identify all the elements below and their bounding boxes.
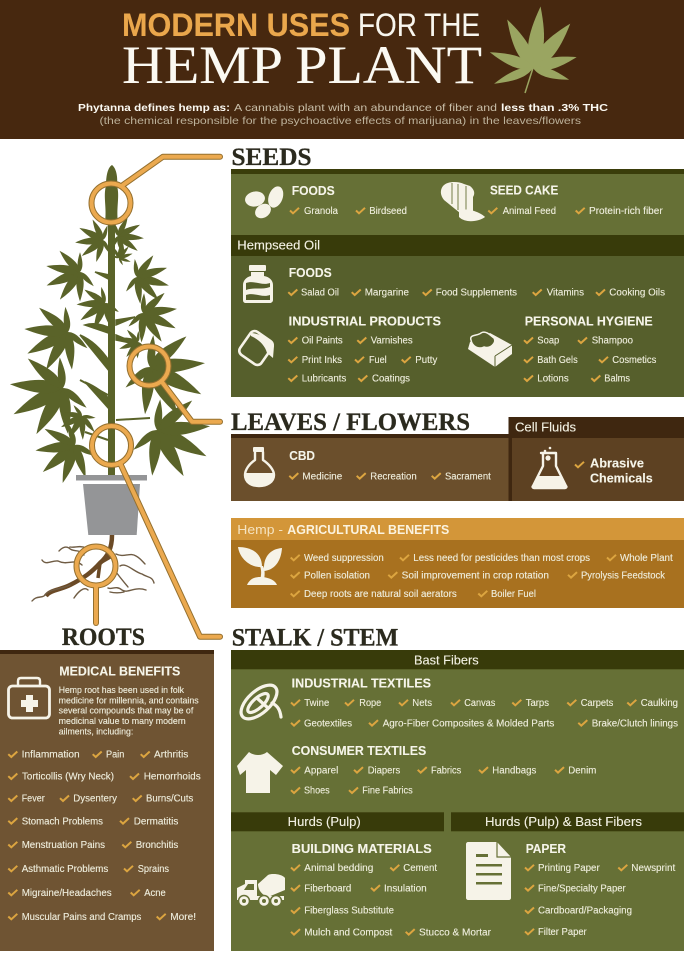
medical benefits description: medicinal value to many modern <box>59 716 186 726</box>
ailments checklist: Fever <box>22 794 45 805</box>
medical benefits description: several compounds that may be of <box>59 706 194 716</box>
industrial products: Print Inks <box>302 355 342 366</box>
consumer textiles: Fabrics <box>431 765 461 776</box>
benefits checklist: Less need for pesticides than most crops <box>413 553 590 564</box>
oil foods: FOODS <box>289 266 332 280</box>
leaves <box>0 215 227 498</box>
abrasive chemicals <box>575 457 653 485</box>
panel: leaves and flowers <box>231 409 509 501</box>
consumer textiles <box>291 744 596 797</box>
benefits checklist: Deep roots are natural soil aerators <box>304 589 457 600</box>
definition text: less than .3% THC <box>501 102 608 114</box>
cbd: Medicine <box>302 471 343 482</box>
heading: seeds: SEEDS <box>232 144 312 171</box>
benefits checklist <box>291 553 673 600</box>
oil foods: Vitamins <box>547 288 584 299</box>
band label: hurds and bast fibers: Hurds (Pulp) & Bast Fibers <box>485 815 642 829</box>
foods: Birdseed <box>369 206 407 217</box>
personal hygiene: Bath Gels <box>537 355 578 366</box>
cbd: CBD <box>289 449 315 463</box>
panel: agricultural benefits <box>231 518 684 608</box>
ailments checklist: Hemorrhoids <box>144 772 201 783</box>
ailments checklist: Inflammation <box>22 750 80 761</box>
ailments checklist: Arthritis <box>154 750 188 761</box>
icon: seeds <box>244 184 286 221</box>
foods <box>290 184 407 217</box>
title: HEMP PLANT <box>122 35 482 95</box>
personal hygiene: Soap <box>537 336 560 347</box>
seed cake: Animal Feed <box>503 206 556 217</box>
consumer textiles: Apparel <box>304 765 338 776</box>
paper: Cardboard/Packaging <box>538 906 632 917</box>
icon: medical kit <box>8 678 50 718</box>
band label: bast fibers: Bast Fibers <box>414 653 479 667</box>
abrasive chemicals: Abrasive <box>590 457 644 471</box>
benefits checklist: Pyrolysis Feedstock <box>581 570 666 581</box>
icon: bread <box>441 182 485 221</box>
ailments checklist <box>8 750 201 923</box>
ailments checklist: Migraine/Headaches <box>22 888 112 899</box>
building materials: BUILDING MATERIALS <box>292 842 432 856</box>
industrial products <box>288 314 441 385</box>
industrial products: Fuel <box>369 355 387 366</box>
benefits checklist: Weed suppression <box>304 553 384 564</box>
seed cake: Protein-rich fiber <box>589 206 663 217</box>
industrial textiles: Brake/Clutch linings <box>592 718 678 729</box>
ailments checklist: Pain <box>106 750 124 761</box>
consumer textiles: Handbags <box>492 765 536 776</box>
benefits checklist: Whole Plant <box>620 553 673 564</box>
ailments checklist: Asthmatic Problems <box>22 864 108 875</box>
medical benefits heading: MEDICAL BENEFITS <box>59 665 180 679</box>
ailments checklist: Sprains <box>138 864 169 875</box>
band label: agricultural benefits: AGRICULTURAL BENEFITS <box>287 523 449 537</box>
pot <box>76 475 147 535</box>
industrial textiles: INDUSTRIAL TEXTILES <box>292 677 431 691</box>
consumer textiles: Diapers <box>368 765 400 776</box>
title <box>122 7 482 95</box>
roots <box>32 535 154 601</box>
consumer textiles: Shoes <box>304 786 330 797</box>
industrial textiles: Geotextiles <box>304 718 352 729</box>
cbd: Sacrament <box>445 471 491 482</box>
industrial textiles: Nets <box>412 698 432 709</box>
paper: Newsprint <box>631 863 676 874</box>
benefits checklist: Boiler Fuel <box>491 589 536 600</box>
personal hygiene: Balms <box>604 374 630 385</box>
band label: agricultural benefits: Hemp - <box>237 523 283 537</box>
icon: bottle <box>243 265 273 303</box>
paper: Fine/Specialty Paper <box>538 883 626 894</box>
paper <box>525 842 676 938</box>
panel: stalk and stem <box>231 625 684 951</box>
definition text: Phytanna defines hemp as: <box>78 102 230 114</box>
industrial textiles: Caulking <box>641 698 678 709</box>
industrial textiles: Twine <box>304 698 330 709</box>
icon: document <box>466 842 511 900</box>
oil foods: Salad Oil <box>301 288 339 299</box>
paper: Filter Paper <box>538 927 587 938</box>
industrial products: Varnishes <box>371 336 413 347</box>
ailments checklist: More! <box>170 912 196 923</box>
industrial products: Lubricants <box>302 374 346 385</box>
ailments checklist: Dermatitis <box>134 816 178 827</box>
personal hygiene: Lotions <box>537 374 569 385</box>
icon: cement truck <box>237 874 285 906</box>
icon: cbd flask <box>245 447 274 486</box>
icon: soap <box>468 332 512 367</box>
heading: leaves / flowers: LEAVES / FLOWERS <box>231 409 470 436</box>
benefits checklist: Soil improvement in crop rotation <box>402 570 549 581</box>
building materials: Insulation <box>384 883 427 894</box>
title: FOR THE <box>358 7 480 43</box>
personal hygiene: Shampoo <box>592 336 633 347</box>
panel: cell fluids <box>508 417 684 501</box>
medical benefits description <box>59 685 199 736</box>
definition text: A cannabis plant with an abundance of fiber and <box>234 102 497 114</box>
ailments checklist: Muscular Pains and Cramps <box>22 912 141 923</box>
medical benefits description: Hemp root has been used in folk <box>59 685 185 695</box>
seed cake: SEED CAKE <box>490 183 558 197</box>
personal hygiene <box>524 314 656 385</box>
industrial products: Coatings <box>372 374 410 385</box>
industrial textiles: Tarps <box>526 698 549 709</box>
seed cake <box>488 183 663 217</box>
industrial textiles: Agro-Fiber Composites & Molded Parts <box>383 718 554 729</box>
oil foods: Margarine <box>365 288 409 299</box>
icon: erlenmeyer flask <box>533 447 566 488</box>
building materials: Mulch and Compost <box>304 927 393 938</box>
panel: seeds <box>231 144 684 397</box>
building materials: Fiberboard <box>304 883 351 894</box>
oil foods: Food Supplements <box>436 288 517 299</box>
plant illustration <box>0 157 227 637</box>
band: hempseed oil: Hempseed Oil <box>237 238 320 252</box>
industrial products: Putty <box>415 355 437 366</box>
title: MODERN USES <box>122 7 350 43</box>
consumer textiles: Denim <box>568 765 596 776</box>
stem and bud <box>80 165 140 476</box>
consumer textiles: Fine Fabrics <box>362 786 413 797</box>
building materials: Cement <box>403 863 437 874</box>
consumer textiles: CONSUMER TEXTILES <box>292 744 426 758</box>
personal hygiene: PERSONAL HYGIENE <box>525 314 653 328</box>
building materials: Fiberglass Substitute <box>304 906 394 917</box>
foods: Granola <box>304 206 338 217</box>
medical benefits description: ailments, including: <box>59 726 133 736</box>
band label: hurds: Hurds (Pulp) <box>288 815 361 829</box>
ailments checklist: Menstruation Pains <box>22 840 105 851</box>
industrial products: INDUSTRIAL PRODUCTS <box>289 314 441 328</box>
ailments checklist: Torticollis (Wry Neck) <box>22 772 114 783</box>
benefits checklist: Pollen isolation <box>304 570 370 581</box>
paper: PAPER <box>526 842 566 856</box>
ailments checklist: Stomach Problems <box>22 816 103 827</box>
paper: Printing Paper <box>538 863 600 874</box>
industrial textiles: Canvas <box>464 698 495 709</box>
icon: sprout <box>238 547 282 585</box>
icon: rope <box>235 679 283 725</box>
definition text <box>78 102 608 127</box>
icon: t-shirt <box>237 752 283 793</box>
industrial textiles: Carpets <box>581 698 613 709</box>
header banner <box>0 0 684 139</box>
ailments checklist: Bronchitis <box>136 840 178 851</box>
definition text: (the chemical responsible for the psychoactive effects of marijuana) in the leaves/flowers <box>100 115 581 127</box>
abrasive chemicals: Chemicals <box>590 471 653 485</box>
cbd: Recreation <box>370 471 417 482</box>
industrial textiles <box>291 677 678 729</box>
callout lines and rings <box>76 157 220 637</box>
panel: roots <box>0 624 214 951</box>
oil foods <box>288 266 665 299</box>
icon: paint can <box>237 329 275 367</box>
icon: hemp leaf <box>488 6 578 93</box>
building materials: Stucco & Mortar <box>419 927 492 938</box>
personal hygiene: Cosmetics <box>612 355 656 366</box>
building materials: Animal bedding <box>304 863 373 874</box>
cbd <box>289 449 491 482</box>
ailments checklist: Burns/Cuts <box>146 794 193 805</box>
heading: roots: ROOTS <box>62 624 145 651</box>
industrial products: Oil Paints <box>302 336 343 347</box>
medical benefits description: medicine for millennia, and contains <box>59 695 199 705</box>
oil foods: Cooking Oils <box>609 288 665 299</box>
ailments checklist: Dysentery <box>73 794 117 805</box>
ailments checklist: Acne <box>144 888 166 899</box>
band label: cell fluids: Cell Fluids <box>515 421 576 435</box>
building materials <box>291 842 492 938</box>
industrial textiles: Rope <box>359 698 382 709</box>
foods: FOODS <box>292 184 335 198</box>
heading: stalk / stem: STALK / STEM <box>232 625 398 652</box>
